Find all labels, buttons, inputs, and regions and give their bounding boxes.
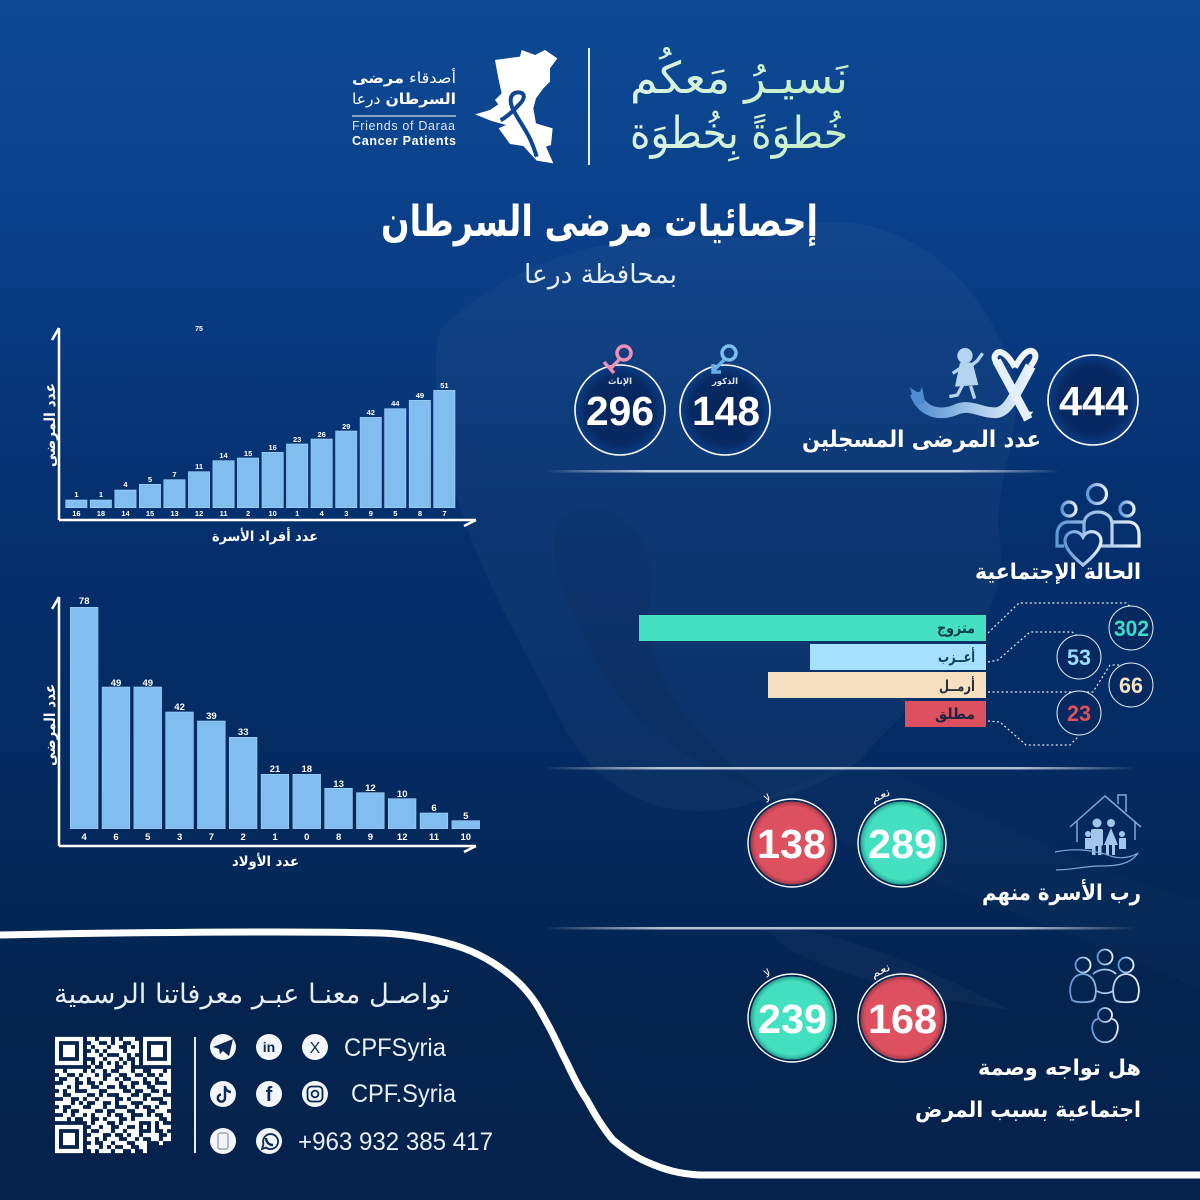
- icon: linkedin: [256, 1034, 282, 1060]
- value: divorced: [1057, 691, 1101, 735]
- icon: tiktok: [210, 1081, 236, 1107]
- value: single: 53: [1067, 645, 1091, 670]
- value labels: 78: [79, 596, 89, 607]
- handle: CPF.Syria: CPF.Syria: [351, 1080, 456, 1108]
- category labels: 15: [146, 509, 154, 518]
- heading: اجتماعية بسبب المرض: [915, 1098, 1141, 1123]
- category labels: 10: [269, 509, 277, 518]
- category labels: [82, 832, 471, 843]
- yes circle: [858, 960, 946, 1062]
- category labels: 9: [368, 832, 373, 843]
- chart: family size: [41, 326, 476, 545]
- value labels: [74, 326, 449, 499]
- x axis title: عدد أفراد الأسرة: [212, 527, 318, 545]
- category labels: 11: [429, 832, 440, 843]
- panel: marital status: [639, 484, 1153, 745]
- bar: divorced: [905, 701, 986, 727]
- female circle: [575, 346, 665, 455]
- category labels: 2: [246, 509, 250, 518]
- value labels: 33: [238, 727, 248, 738]
- category labels: 5: [393, 509, 397, 518]
- icon: facebook: f: [266, 1084, 273, 1106]
- male circle: [680, 346, 770, 455]
- no circle: [748, 966, 836, 1062]
- value: single: [1057, 635, 1101, 679]
- female circle: 296: [586, 388, 654, 434]
- value labels: 1: [99, 490, 103, 499]
- icon: instagram: [302, 1081, 328, 1107]
- value: married: 302: [1114, 616, 1149, 641]
- value labels: 15: [244, 449, 252, 458]
- icon: facebook: [256, 1081, 282, 1107]
- value labels: 42: [367, 408, 375, 417]
- panel: registered patients: [575, 346, 1138, 455]
- contact heading: تواصـل معنـا عبـر معرفاتنا الرسمية: [54, 979, 450, 1010]
- category labels: 7: [442, 509, 446, 518]
- y axis title: عدد المرضى: [41, 383, 59, 467]
- icon: X: [302, 1034, 328, 1060]
- male circle: الذكور: [711, 377, 738, 387]
- value labels: 18: [302, 764, 312, 775]
- icon: girl on ribbon: [910, 348, 1035, 422]
- total circle: 444: [1059, 378, 1128, 424]
- bar: widowed: [768, 672, 986, 698]
- yes circle: نعم: [869, 960, 892, 981]
- category labels: 4: [320, 509, 325, 518]
- category labels: [72, 509, 446, 518]
- value labels: 5: [463, 811, 469, 822]
- bar: single: [810, 644, 986, 670]
- value labels: 4: [123, 480, 128, 489]
- value: divorced: 23: [1067, 701, 1091, 726]
- value: widowed: [1109, 663, 1153, 707]
- value labels: 6: [431, 803, 437, 814]
- category labels: 6: [113, 832, 119, 843]
- bar: single: أعــزب: [938, 647, 975, 666]
- yes circle: نعم: [869, 785, 892, 806]
- heading: هل تواجه وصمة: [978, 1056, 1141, 1081]
- no circle: لا: [762, 791, 773, 806]
- footer contact curve: [0, 932, 1200, 1175]
- value labels: 12: [365, 783, 376, 794]
- no circle: 138: [757, 821, 826, 867]
- value labels: 75: [195, 326, 203, 333]
- category labels: 0: [304, 832, 309, 843]
- icon: X: X: [310, 1040, 321, 1057]
- category labels: 10: [461, 832, 471, 843]
- QR code: [55, 1039, 171, 1151]
- no circle: 239: [758, 996, 827, 1042]
- icon: family with heart: [1057, 484, 1139, 565]
- heading: الحالة الإجتماعية: [975, 560, 1141, 585]
- value labels: 7: [172, 470, 177, 479]
- category labels: 1: [272, 832, 278, 843]
- category labels: 12: [195, 509, 203, 518]
- bar: married: متزوج: [937, 619, 975, 637]
- icon: mobile phone: [210, 1128, 236, 1154]
- female circle: الإناث: [608, 377, 632, 387]
- no circle: [748, 791, 836, 887]
- category labels: 7: [209, 832, 214, 843]
- value labels: 49: [111, 678, 121, 689]
- logo arabic name: [352, 68, 456, 108]
- yes circle: [858, 785, 946, 887]
- logo arabic name: أصدقاء مرضى: [352, 68, 456, 87]
- bars: [70, 607, 480, 829]
- vertical divider: [194, 1037, 196, 1153]
- value labels: 13: [333, 779, 344, 790]
- heading: [915, 1056, 1141, 1123]
- value labels: 42: [174, 702, 185, 713]
- value labels: 1: [74, 490, 78, 499]
- slogan: [630, 46, 849, 163]
- logo english name: Cancer Patients: [352, 134, 456, 148]
- value labels: 29: [342, 422, 350, 431]
- value labels: 51: [440, 381, 449, 390]
- bars: [66, 390, 455, 508]
- value labels: 14: [219, 451, 229, 460]
- category labels: 11: [220, 509, 228, 518]
- chart: number of children: [41, 596, 480, 870]
- yes circle: 168: [868, 996, 937, 1042]
- logo english name: Friends of Daraa: [352, 119, 455, 133]
- category labels: 12: [397, 832, 407, 843]
- panel: contact: [54, 979, 493, 1156]
- value labels: 26: [318, 430, 326, 439]
- category labels: 3: [344, 509, 348, 518]
- male circle: 148: [692, 388, 760, 434]
- x axis title: عدد الأولاد: [232, 853, 299, 870]
- icon: whatsapp: [256, 1128, 282, 1154]
- icon: Daraa map with ribbon: [475, 50, 557, 163]
- category labels: 2: [241, 832, 246, 843]
- handle: CPFSyria: CPFSyria: [344, 1034, 446, 1062]
- category labels: 14: [121, 509, 130, 518]
- axes: [52, 328, 476, 526]
- value labels: 23: [293, 435, 301, 444]
- slogan: نَسيـرُ مَعكُم: [630, 46, 849, 104]
- category labels: 3: [177, 832, 182, 843]
- panel: head of household: [748, 785, 1141, 906]
- bar: married: [639, 615, 986, 641]
- category labels: 13: [170, 509, 179, 518]
- category labels: 18: [97, 509, 105, 518]
- label: عدد المرضى المسجلين: [802, 427, 1041, 453]
- yes circle: 289: [868, 821, 937, 867]
- title: إحصائيات مرضى السرطان: [381, 197, 818, 247]
- icon: house with family: [1055, 795, 1141, 870]
- value: widowed: 66: [1119, 673, 1143, 698]
- category labels: 5: [145, 832, 151, 843]
- y axis title: عدد المرضى: [41, 684, 59, 766]
- dotted connectors: [988, 603, 1131, 745]
- icon: group and isolated person: [1070, 950, 1139, 1042]
- category labels: 1: [295, 509, 299, 518]
- slogan: خُطوَةً بِخُطوَة: [630, 108, 848, 163]
- header logo block: [352, 50, 557, 163]
- phone number: +963 932 385 417: [298, 1128, 493, 1156]
- heading: رب الأسرة منهم: [982, 878, 1141, 906]
- bar: divorced: مطلق: [935, 705, 975, 723]
- value labels: [79, 596, 469, 822]
- logo english name: [352, 116, 456, 148]
- value: married: [1109, 606, 1153, 650]
- category labels: 4: [82, 832, 88, 843]
- header divider: [588, 48, 590, 165]
- no circle: لا: [762, 966, 773, 981]
- category labels: 9: [369, 509, 373, 518]
- bar: widowed: أرمــل: [939, 676, 975, 695]
- subtitle: بمحافظة درعا: [524, 260, 677, 290]
- axes: [52, 597, 476, 852]
- panel: social stigma: [748, 950, 1141, 1123]
- value labels: 49: [416, 391, 424, 400]
- value labels: 49: [143, 678, 153, 689]
- value labels: 5: [148, 475, 152, 484]
- category labels: 16: [72, 509, 81, 518]
- icon: linkedin: in: [263, 1039, 275, 1055]
- icon: telegram: [210, 1034, 236, 1060]
- total circle: [1048, 355, 1138, 445]
- value labels: 11: [195, 462, 203, 471]
- value labels: 44: [391, 399, 400, 408]
- logo arabic name: السرطان درعا: [352, 90, 456, 108]
- value labels: 39: [206, 711, 217, 722]
- value labels: 10: [397, 789, 407, 800]
- category labels: 8: [336, 832, 341, 843]
- value labels: 21: [270, 764, 281, 775]
- category labels: 8: [418, 509, 422, 518]
- value labels: 16: [269, 443, 277, 452]
